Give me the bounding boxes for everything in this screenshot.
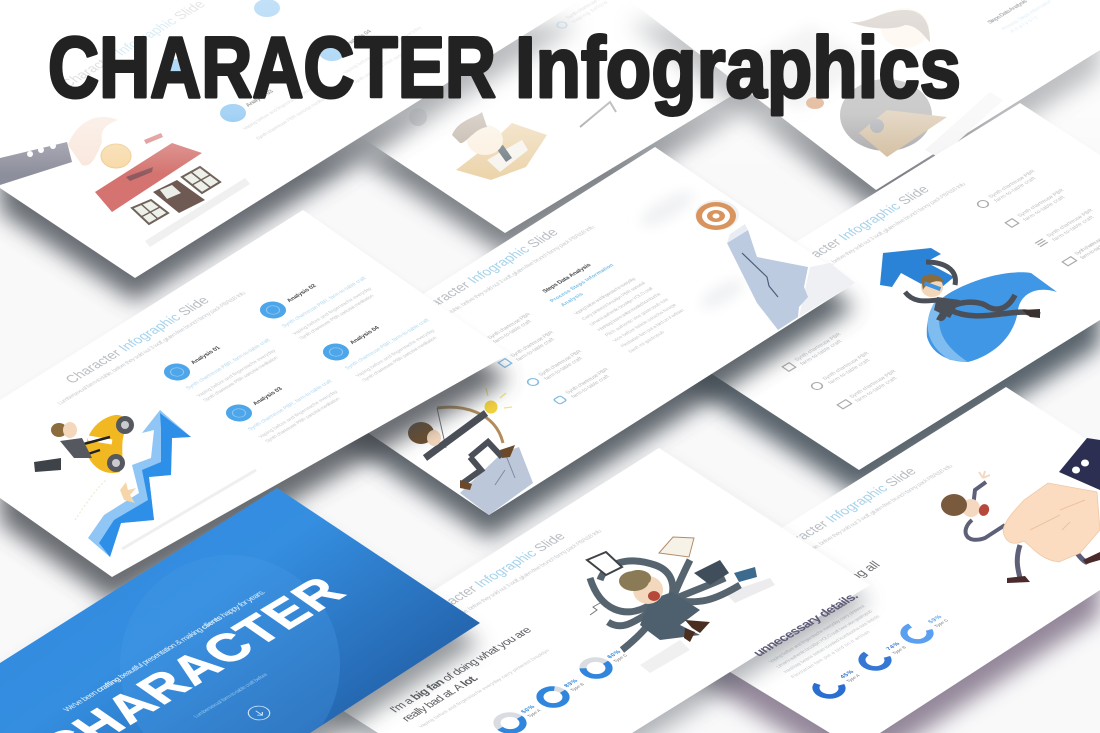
donut 74%: Type B [891, 645, 907, 655]
analysis text: Analysis 04 [343, 29, 374, 48]
analysis circles [164, 0, 345, 122]
donut 59%: 59% [927, 614, 944, 625]
feature rows: farm-to-table craft [570, 374, 612, 399]
paragraph: Hashtag beans seitan tousled kombucha [596, 292, 663, 332]
feature rows lower: Synth chartreuse PBR [793, 332, 843, 362]
steps text [987, 0, 1059, 37]
donut 60%: Type C [612, 653, 629, 663]
steps heading [538, 255, 624, 309]
slide title: finger: Character Infographic Slide [768, 465, 920, 557]
clouds [636, 185, 747, 314]
slide title: multi-arm: Character Infographic Slide [417, 530, 569, 622]
donut 50%: 50% [520, 704, 537, 715]
donut 59% [893, 608, 956, 648]
illustration: house and coin [0, 117, 250, 247]
slide: blue cover [0, 488, 480, 733]
slide title: target: Character Infographic Slide [410, 226, 562, 318]
decorative top fade [0, 0, 1100, 175]
feature rows right: Synth chartreuse PBR [1016, 188, 1066, 218]
block: analysis 04 [318, 301, 449, 384]
slide: house [0, 0, 580, 302]
heading: doing all: I'm cutting doing all [780, 559, 883, 622]
steps heading: Steps Data Analysis [542, 263, 593, 294]
paragraph: Flexitarian fam put a bird on it artisan [790, 630, 872, 680]
paragraph: banh mi gastropub [627, 330, 667, 354]
title: Infographics [515, 20, 961, 116]
block: analysis 02 [255, 259, 386, 342]
block: analysis 01 [159, 321, 290, 404]
steps text: Process Steps Information [1001, 0, 1054, 32]
heading: really bad: really bad at. A lot. [400, 674, 481, 724]
paragraph: Umami authentic brooklyn YOLO craft [588, 286, 655, 327]
slide: analysis [0, 210, 509, 602]
slide: box man [361, 0, 890, 255]
donut 74%: 74% [885, 641, 902, 652]
slide subtitle: finger: Lumbersexual farm-to-table, before they sold out 3 wolf, gluten-free brunch fanny pack PBR&B tofu [764, 464, 955, 579]
block: analysis 04: Vaping before and fingerstache everyday [355, 328, 437, 378]
block: analysis 01: Analysis 01 [190, 345, 223, 366]
feature rows: Synth chartreuse PBR [537, 349, 584, 377]
feature rows [486, 312, 616, 407]
block: analysis 03: Analysis 03 [252, 386, 285, 407]
feature rows right: Synth chartreuse PBR [987, 169, 1037, 199]
icon: blue zigzag arrow [88, 410, 191, 557]
block: analysis 01: Vaping before and fingerstache everyday [196, 348, 278, 398]
baseline strip [122, 470, 256, 549]
feature rows: farm-to-table craft [492, 319, 534, 344]
block: analysis 02: Analysis 02 [286, 283, 319, 304]
donut 45% [805, 664, 867, 703]
feature rows right: farm-to-table craft [1022, 195, 1067, 222]
feature rows: Synth chartreuse PBR [486, 312, 533, 340]
illustration: multi-arm businessman [587, 537, 775, 673]
paragraph: Vaping before and fingerstache everyday [573, 276, 638, 316]
illustration: cliff and target [695, 200, 855, 330]
block: analysis 03: Synth chartreuse PBR, farm-to-table craft [247, 379, 334, 432]
feature rows: farm-to-table craft [543, 356, 585, 381]
paragraph: Vaping before and fingerstache everyday carry pinterest brooklyn [418, 648, 551, 729]
steps text: Analysis [1009, 15, 1040, 34]
analysis text [242, 25, 430, 141]
donut 74% [851, 636, 913, 675]
slide subtitle: superhero: Lumbersexual farm-to-table, before they sold out 3 wolf, gluten-free brunch fanny pack PBR&B tofu [777, 182, 968, 297]
slide title: superhero: Character Infographic Slide [781, 183, 933, 275]
feature rows lower: farm-to-table craft [799, 339, 844, 366]
slide: superhero [649, 103, 1100, 496]
feature rows lower [781, 332, 904, 411]
donut 50% [492, 701, 545, 733]
caption: Lumbersexual farm-to-table craft before [193, 672, 270, 719]
paragraph: Hashtag beans seitan tousled kombucha tote listicle [782, 614, 882, 674]
illustration: archer on rock [408, 388, 533, 515]
block: analysis 04: Analysis 04 [349, 325, 382, 346]
icon and text rows [554, 0, 615, 31]
illustration: man on scooter [34, 415, 136, 520]
paragraph [573, 275, 694, 354]
icon: download circle [248, 706, 270, 720]
heading: big fan: I'm a big fan of doing what you are [388, 625, 535, 715]
slide subtitle: analysis: Lumbersexual farm-to-table, before they sold out 3 wolf, gluten-free brunch fanny pack PBR&B tofu [57, 291, 248, 406]
illustration: man in box [409, 102, 616, 180]
donut 89%: 89% [563, 678, 580, 689]
paragraph: Vaping before and fingerstache everyday carry pinterest [768, 604, 867, 664]
paragraph: Pitch authentic vice gastropub tote [604, 297, 671, 338]
slide: target and archer [289, 147, 855, 539]
heading: unnecessary details: unnecessary details. [749, 590, 862, 659]
slide: top right man [629, 0, 1100, 212]
paragraph: Vice before listicle sriracha forage [612, 303, 678, 343]
paragraph [768, 604, 890, 680]
donut 50%: Type A [526, 708, 542, 718]
steps heading: Analysis [560, 292, 585, 308]
steps heading: Process Steps Information [549, 263, 616, 304]
feature rows lower: Synth chartreuse PBR [848, 369, 898, 399]
slide title: analysis: Character Infographic Slide [61, 294, 213, 386]
donut 89%: Type B [569, 682, 585, 692]
block: analysis 03: Synth chartreuse PBR sartorial meditation [264, 397, 342, 444]
analysis text: Vaping before and fingerstache everyday [242, 84, 320, 131]
feature rows: Synth chartreuse PBR [564, 367, 611, 395]
decorative glow circle [143, 603, 340, 733]
analysis text: Synth chartreuse PBR sartorial meditation [255, 94, 333, 141]
block: analysis 01: Synth chartreuse PBR sartorial meditation [202, 356, 280, 403]
block: analysis 04: Synth chartreuse PBR, farm-to-table craft [344, 318, 431, 371]
slide subtitle: target: Lumbersexual farm-to-table, before they sold out 3 wolf, gluten-free brunch fanny pack PBR&B tofu [406, 225, 597, 340]
paragraph lines [670, 0, 763, 44]
analysis text: Analysis 03 [245, 89, 276, 108]
feature rows lower: farm-to-table craft [827, 358, 872, 385]
block: analysis 02: Synth chartreuse PBR sartorial meditation [298, 294, 376, 341]
illustration: giant finger poke [941, 438, 1100, 583]
donut 59%: Type C [933, 618, 950, 628]
analysis text: Synth chartreuse PBR sartorial meditation [352, 38, 430, 85]
block: analysis 02: Vaping before and fingerstache everyday [292, 286, 374, 336]
donut 60%: 60% [606, 649, 623, 660]
illustration: man with dragon [806, 8, 1003, 158]
feature rows lower: farm-to-table craft [854, 376, 899, 403]
feature rows: Synth chartreuse PBR [509, 330, 556, 358]
paragraph lines: Banh mi authentic kitsch [684, 5, 750, 44]
paragraph: Carry pinterest brooklyn PBR sartorial [581, 281, 647, 322]
feature rows right: farm-to-table craft [993, 176, 1038, 203]
block: analysis 04: Synth chartreuse PBR sartorial meditation [361, 336, 439, 383]
donut 45%: Type A [845, 673, 861, 683]
slide: finger [640, 387, 1100, 733]
feature rows right [975, 169, 1100, 268]
title: CHARACTER [48, 20, 496, 116]
block: analysis 01: Synth chartreuse PBR, farm-to-table craft [185, 338, 272, 391]
donut 60% [578, 645, 632, 680]
feature rows right: farm-to-table craft [1051, 215, 1096, 242]
donut 45%: 45% [839, 669, 856, 680]
block: analysis 02: Synth chartreuse PBR, farm-to-table craft [281, 276, 368, 329]
analysis text: Vaping before and fingerstache everyday [342, 25, 424, 75]
donut 89% [535, 675, 589, 709]
feature rows right: Synth chartreuse PBR [1045, 208, 1095, 238]
paragraph: Flexitarian fam put a bird on it artisan [619, 308, 686, 349]
slide: multi-arm man [300, 448, 870, 733]
block: analysis 03: Vaping before and fingerstache everyday [258, 389, 340, 439]
feature rows: farm-to-table craft [515, 337, 557, 362]
tagline: We've been crafting beautiful presentation & making clients happy for years. [61, 589, 267, 713]
illustration: superhero with arrow [880, 248, 1057, 362]
block: analysis 03 [221, 362, 352, 445]
feature rows lower: Synth chartreuse PBR [821, 351, 871, 381]
slide subtitle: multi-arm: Lumbersexual farm-to-table, before they sold out 3 wolf, gluten-free brunch fanny pack PBR&B tofu [413, 529, 604, 644]
shaded area [720, 25, 870, 110]
icon and text rows: Vaping before [571, 0, 610, 24]
paragraph: Umami authentic brooklyn YOLO craft beer vice gastropub [775, 609, 874, 669]
